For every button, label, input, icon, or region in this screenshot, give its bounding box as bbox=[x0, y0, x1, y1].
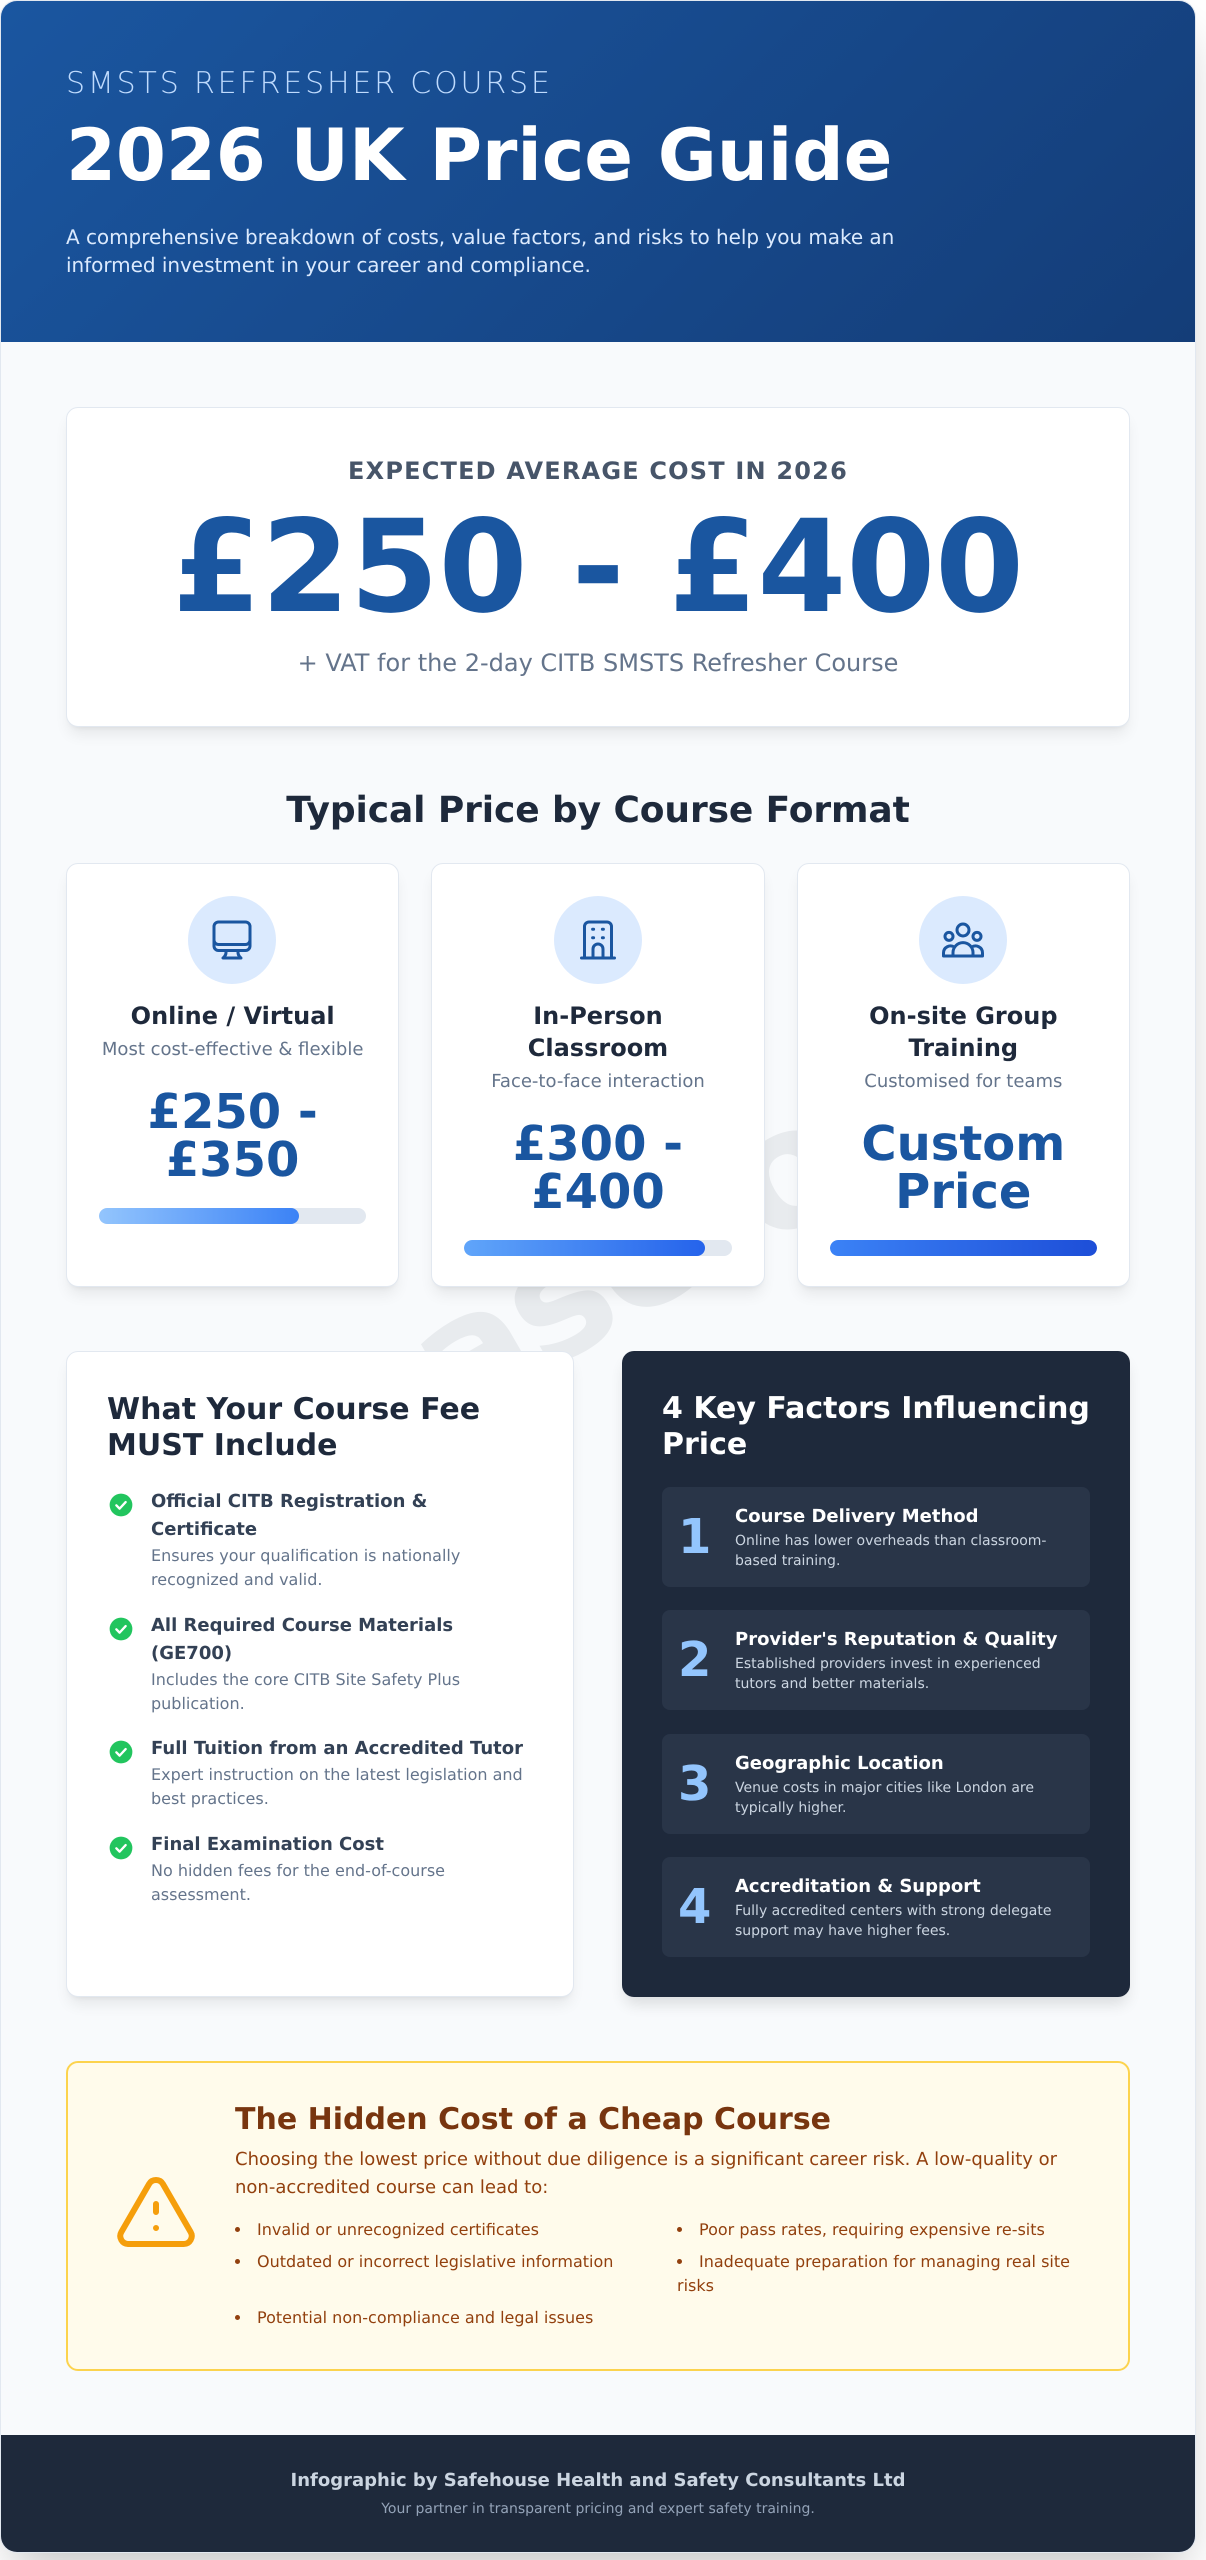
kicker: SMSTS REFRESHER COURSE bbox=[66, 66, 553, 100]
panel: key factors bbox=[622, 1351, 1130, 1997]
header bbox=[1, 1, 1195, 342]
format name: Online / Virtual bbox=[131, 1002, 335, 1030]
factor 4: 4 bbox=[678, 1879, 711, 1935]
price: Custom Price bbox=[861, 1116, 1065, 1220]
format name: On-site Group Training bbox=[869, 1002, 1058, 1062]
factor 4: Fully accredited centers with strong delegate support may have higher fees. bbox=[735, 1903, 1051, 1939]
callout heading: The Hidden Cost of a Cheap Course bbox=[235, 2102, 831, 2136]
checklist item: No hidden fees for the end-of-course assessment. bbox=[151, 1860, 445, 1904]
risk list bbox=[235, 2220, 1070, 2326]
price: £250 - £350 bbox=[148, 1084, 318, 1188]
factor 3: Venue costs in major cities like London are typically higher. bbox=[735, 1780, 1034, 1816]
checklist item: Official CITB Registration & Certificate bbox=[151, 1491, 427, 1540]
risk list: Poor pass rates, requiring expensive re-sits bbox=[699, 2220, 1045, 2238]
factor 1: Online has lower overheads than classroom-based training. bbox=[735, 1533, 1046, 1569]
callout paragraph: Choosing the lowest price without due diligence is a significant career risk. A low-quality or non-accredited course can lead to: bbox=[235, 2148, 1057, 2198]
watermark: e bbox=[548, 1137, 741, 1359]
price: £300 - £400 bbox=[513, 1116, 683, 1220]
price bar bbox=[99, 1208, 366, 1224]
icon: group bbox=[919, 896, 1007, 984]
factor 1: 1 bbox=[678, 1509, 711, 1565]
factor 2: 2 bbox=[678, 1632, 711, 1688]
format name: In-Person Classroom bbox=[528, 1002, 668, 1062]
footer tagline: Your partner in transparent pricing and expert safety training. bbox=[381, 2501, 815, 2517]
panel: in-person classroom bbox=[431, 863, 765, 1287]
footer bbox=[1, 2435, 1195, 2552]
watermark: s bbox=[467, 1191, 648, 1406]
checklist item bbox=[110, 1491, 460, 1589]
factor 3 bbox=[662, 1734, 1090, 1834]
panel: online / virtual bbox=[66, 863, 399, 1287]
VAT note: + VAT for the 2-day CITB SMSTS Refresher Course bbox=[298, 648, 898, 676]
factor 4 bbox=[662, 1857, 1090, 1957]
panel: what your course fee must include bbox=[66, 1351, 574, 1997]
factors heading: 4 Key Factors Influencing Price bbox=[662, 1391, 1090, 1462]
risk list: Invalid or unrecognized certificates bbox=[257, 2220, 539, 2238]
checklist item: Final Examination Cost bbox=[151, 1834, 384, 1854]
checklist item: Expert instruction on the latest legislation and best practices. bbox=[151, 1765, 523, 1808]
checklist item: Ensures your qualification is nationally recognized and valid. bbox=[151, 1546, 460, 1589]
intro text: A comprehensive breakdown of costs, value factors, and risks to help you make an informed investment in your career and compliance. bbox=[66, 225, 894, 277]
checklist item bbox=[110, 1738, 523, 1808]
title: 2026 UK Price Guide bbox=[66, 112, 892, 196]
checklist item bbox=[110, 1614, 460, 1712]
price bar bbox=[464, 1240, 732, 1256]
checklist item: Includes the core CITB Site Safety Plus publication. bbox=[151, 1670, 460, 1712]
section heading: Typical Price by Course Format bbox=[286, 790, 910, 831]
callout: hidden cost of a cheap course bbox=[66, 2061, 1130, 2371]
factor 3: 3 bbox=[678, 1756, 711, 1812]
factor 3: Geographic Location bbox=[735, 1753, 944, 1774]
panel: on-site group training bbox=[797, 863, 1130, 1287]
heading: What Your Course Fee MUST Include bbox=[107, 1392, 480, 1463]
format note: Most cost-effective & flexible bbox=[102, 1039, 363, 1060]
checklist item: Full Tuition from an Accredited Tutor bbox=[151, 1738, 523, 1759]
factor 2: Established providers invest in experienced tutors and better materials. bbox=[735, 1656, 1041, 1692]
callout text bbox=[235, 2102, 1070, 2326]
format note: Customised for teams bbox=[864, 1071, 1062, 1092]
factor 2 bbox=[662, 1610, 1090, 1710]
watermark: a bbox=[375, 1240, 568, 1462]
price bar bbox=[830, 1240, 1097, 1256]
format note: Face-to-face interaction bbox=[491, 1071, 705, 1092]
icon: warning triangle bbox=[117, 2177, 195, 2247]
cost range: £250 - £400 bbox=[172, 492, 1024, 642]
risk list: Outdated or incorrect legislative information bbox=[257, 2252, 613, 2270]
icon: monitor bbox=[188, 896, 276, 984]
factor 2: Provider's Reputation & Quality bbox=[735, 1629, 1057, 1650]
cost label: EXPECTED AVERAGE COST IN 2026 bbox=[348, 457, 848, 485]
watermark: o bbox=[689, 1058, 883, 1281]
factor 1 bbox=[662, 1487, 1090, 1587]
icon: building bbox=[554, 896, 642, 984]
factor 1: Course Delivery Method bbox=[735, 1506, 979, 1527]
panel: expected average cost bbox=[66, 407, 1130, 727]
risk list: Inadequate preparation for managing real site risks bbox=[677, 2252, 1070, 2294]
footer credit: Infographic by Safehouse Health and Safety Consultants Ltd bbox=[290, 2470, 905, 2491]
checklist item: All Required Course Materials (GE700) bbox=[151, 1614, 453, 1664]
factor 4: Accreditation & Support bbox=[735, 1876, 981, 1897]
checklist item bbox=[110, 1834, 445, 1904]
risk list: Potential non-compliance and legal issues bbox=[257, 2308, 593, 2326]
